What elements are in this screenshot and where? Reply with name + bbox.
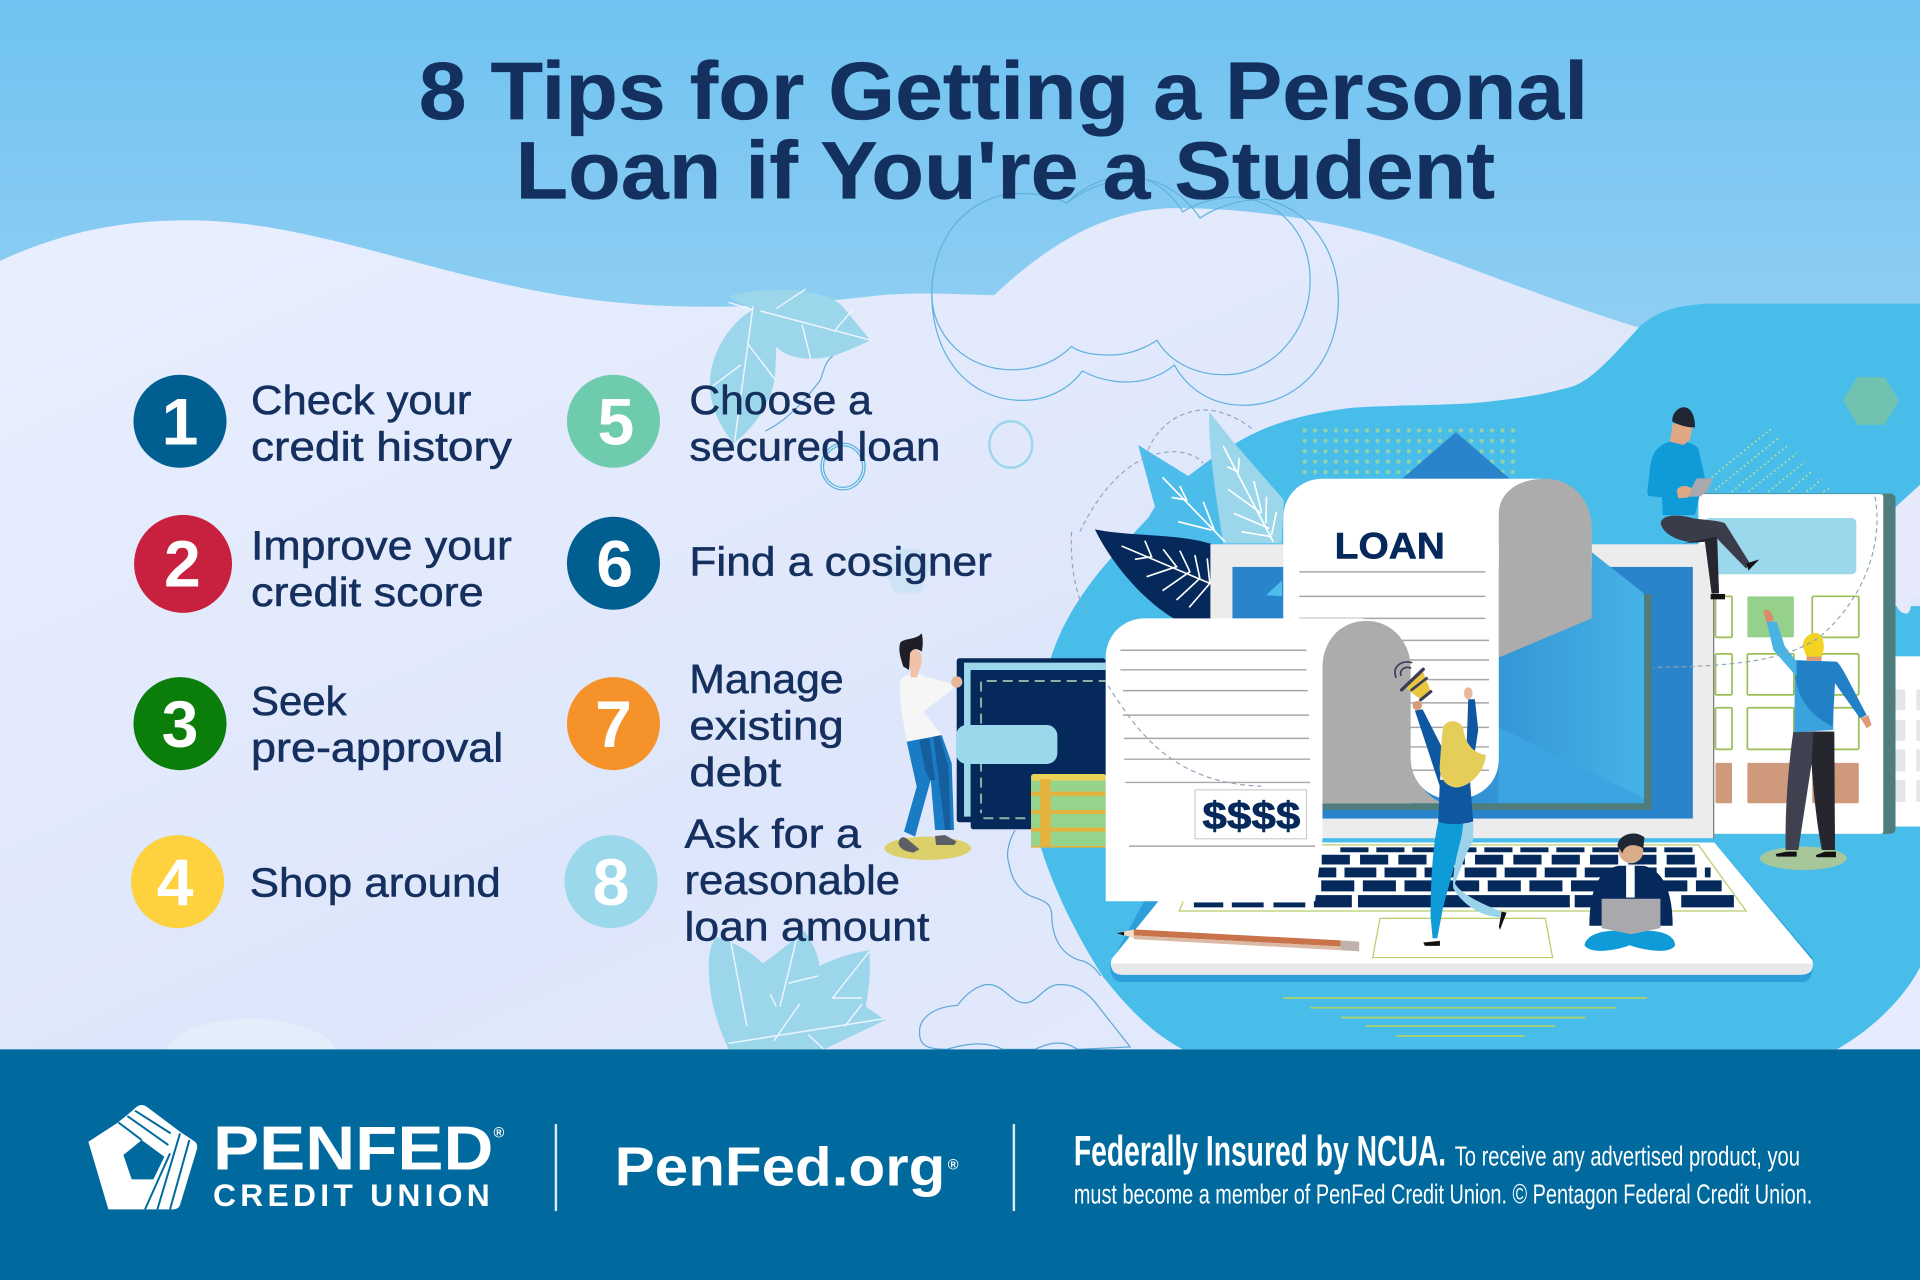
tip 1: Check your xyxy=(251,377,471,423)
decor: lavender panel at right edge xyxy=(1896,485,1920,613)
icon: laptop xyxy=(1110,544,1813,982)
icon: invoice document xyxy=(1106,618,1442,901)
logo: wordmark: PENFED xyxy=(213,1113,493,1183)
background: big blue blob xyxy=(1036,304,1920,1049)
icon: man with laptop xyxy=(1584,834,1675,951)
icon: calculator xyxy=(1698,493,1896,834)
tip 1: 1 xyxy=(162,385,198,459)
heading: Loan if You're a Student xyxy=(516,125,1495,216)
tip 6: 6 xyxy=(596,528,633,602)
icon: envelope roof xyxy=(1402,432,1510,479)
decor: cloud outlines xyxy=(932,176,1338,405)
logo: wordmark: ® xyxy=(493,1126,504,1142)
decor: bottom cloud outline xyxy=(920,984,1130,1049)
tip 1 xyxy=(133,375,513,469)
tip 2: credit score xyxy=(251,569,484,615)
tip 6: Find a cosigner xyxy=(689,539,992,585)
icon: wallet xyxy=(956,658,1106,848)
tip 5: Choose a xyxy=(689,377,872,423)
disclaimer: Federally Insured by NCUA. xyxy=(1074,1128,1446,1176)
tip 7 xyxy=(567,656,844,795)
decor: faint hexagon xyxy=(883,549,931,593)
decor: bottom right corner xyxy=(1837,967,1920,1049)
decor: dashed arcs behind leaves xyxy=(1071,410,1253,613)
tip 8: 8 xyxy=(593,846,629,920)
icon: man sitting on calculator xyxy=(1647,407,1759,599)
icon: loan document xyxy=(1283,479,1592,803)
tip 7: Manage xyxy=(689,656,844,702)
tip 7: 7 xyxy=(595,688,632,762)
tip 4: Shop around xyxy=(250,859,501,905)
decor: wavy line xyxy=(1008,830,1101,976)
tip 6 xyxy=(567,517,992,610)
tip 8: reasonable xyxy=(684,857,900,903)
decor: dashed arc over invoice xyxy=(1108,686,1261,786)
footer band xyxy=(0,1049,1920,1280)
tip 2: 2 xyxy=(164,528,201,602)
tip 7: debt xyxy=(689,749,781,795)
heading: 8 Tips for Getting a Personal xyxy=(419,46,1588,137)
tip 8: loan amount xyxy=(684,903,929,949)
tip 3: pre-approval xyxy=(251,725,503,771)
tip 8 xyxy=(564,810,929,949)
decor: diagonal dotted lines xyxy=(1712,428,1830,492)
tip 2 xyxy=(134,515,512,615)
icon: woman with megaphone xyxy=(1395,662,1507,946)
icon: pencil xyxy=(1117,929,1359,951)
decor: pale bump bottom left xyxy=(165,1019,337,1092)
icon: partial calculator at right edge xyxy=(1896,656,1920,827)
decor: bottom green lines xyxy=(1283,998,1647,1036)
background: sky xyxy=(0,0,1920,367)
tip 3: Seek xyxy=(251,678,347,724)
icon: leaves behind laptop xyxy=(1095,412,1284,620)
heading xyxy=(419,46,1588,216)
disclaimer xyxy=(1074,1128,1812,1210)
divider xyxy=(555,1124,557,1211)
tip 5 xyxy=(567,375,940,469)
icon: person with wallet xyxy=(884,633,971,860)
tip 5: secured loan xyxy=(689,423,940,469)
website: PenFed.org xyxy=(615,1135,945,1197)
icon: man at calculator xyxy=(1653,497,1877,870)
logo: PenFed pentagon mark xyxy=(88,1105,197,1209)
tip 3 xyxy=(133,677,503,771)
logo: wordmark: CREDIT UNION xyxy=(213,1177,490,1213)
tip 3: 3 xyxy=(162,688,198,762)
icon: invoice document: $$$$ xyxy=(1202,795,1301,838)
tip 8: Ask for a xyxy=(684,810,861,856)
tip 4 xyxy=(131,835,501,928)
website: ® xyxy=(948,1157,959,1173)
icon: keyboard keys xyxy=(1194,850,1734,907)
icon: trackpad xyxy=(1373,918,1553,958)
decor: dot pattern xyxy=(1297,425,1517,480)
decor: bottom leaf xyxy=(709,931,885,1049)
divider xyxy=(1013,1124,1015,1211)
decor: top leaf xyxy=(710,289,872,443)
icon: loan document: LOAN xyxy=(1335,525,1445,566)
decor: small circles xyxy=(821,421,1032,490)
tip 1: credit history xyxy=(251,423,513,469)
logo: wordmark xyxy=(213,1113,504,1213)
tip 4: 4 xyxy=(157,846,194,920)
tip 7: existing xyxy=(689,703,844,749)
decor: hexagon xyxy=(1843,377,1899,425)
tip 2: Improve your xyxy=(251,523,512,569)
background: lavender wave xyxy=(0,208,1920,1053)
tip 5: 5 xyxy=(598,385,634,459)
